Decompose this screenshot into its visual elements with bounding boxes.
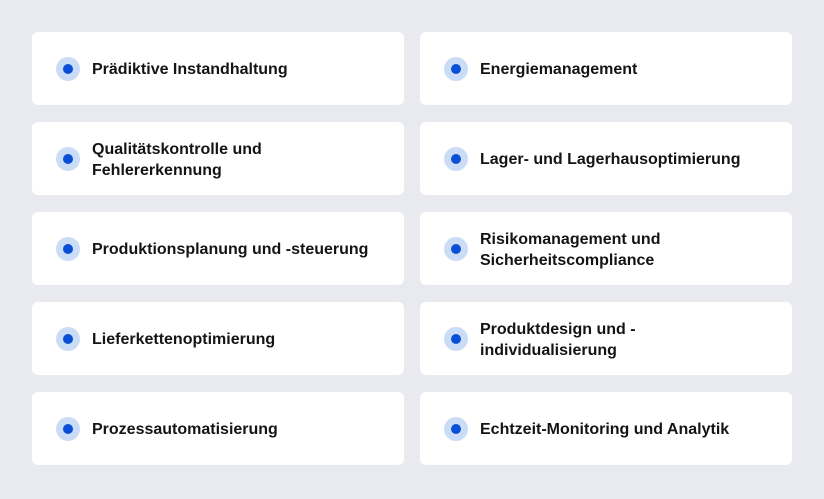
- card: Lager: Lager- und Lagerhausoptimierung: [480, 151, 740, 168]
- card: Produktionsplanung: [32, 212, 404, 285]
- card: Produktdesign: Produktdesign und - individualisierung: [480, 320, 636, 358]
- card: Produktdesign: [420, 302, 792, 375]
- card: Prozessautomatisierung: [32, 392, 404, 465]
- card: Qualitätskontrolle: [32, 122, 404, 195]
- card: Lieferkettenoptimierung: Lieferkettenoptimierung: [92, 331, 275, 348]
- card: Energiemanagement: Energiemanagement: [480, 61, 637, 78]
- card: Lager: [420, 122, 792, 195]
- card: Energiemanagement: [420, 32, 792, 105]
- card: Lieferkettenoptimierung: [32, 302, 404, 375]
- card: Prädiktive Instandhaltung: Prädiktive Instandhaltung: [92, 61, 288, 78]
- card: Echtzeit-Monitoring: Echtzeit-Monitoring und Analytik: [480, 421, 729, 438]
- card: Risikomanagement: Risikomanagement und Sicherheitscompliance: [480, 230, 660, 268]
- card: Risikomanagement: [420, 212, 792, 285]
- card: Qualitätskontrolle: Qualitätskontrolle und Fehlererkennung: [92, 140, 262, 178]
- card: Produktionsplanung: Produktionsplanung und -steuerung: [92, 241, 368, 258]
- card: Prädiktive Instandhaltung: [32, 32, 404, 105]
- card: Echtzeit-Monitoring: [420, 392, 792, 465]
- card: Prozessautomatisierung: Prozessautomatisierung: [92, 421, 278, 438]
